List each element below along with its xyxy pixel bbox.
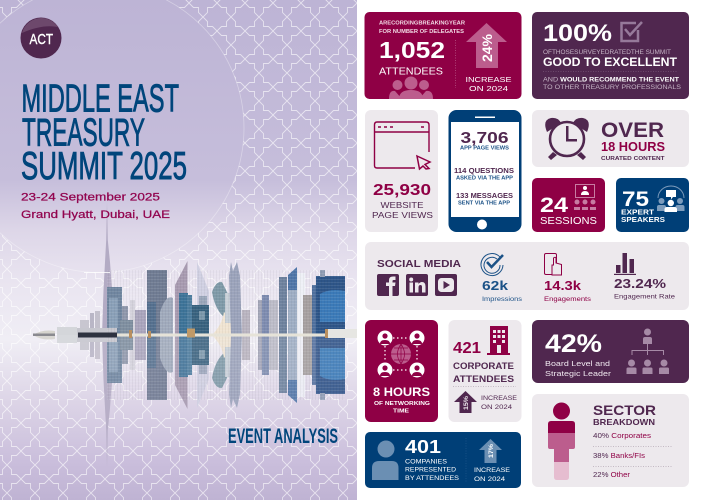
number: 75 speakers: SPEAKERS	[621, 217, 665, 224]
text: board level and strategic leader: Strategic Leader	[545, 369, 612, 378]
panel: website views	[365, 110, 438, 232]
text: over 18 hours	[601, 119, 665, 162]
heading: sector breakdown: SECTOR	[593, 402, 656, 418]
text: increase on 2024: ON 2024	[474, 476, 506, 483]
event date and venue: Grand Hyatt, Dubai, UAE	[21, 209, 170, 221]
text: corporate attendees: CORPORATE	[453, 361, 514, 371]
panel: attendees	[364, 12, 522, 99]
text: 8 hours of networking: 8 HOURS	[373, 387, 430, 399]
number: website page views: WEBSITE	[380, 200, 424, 210]
stat: engagement rate	[614, 253, 675, 300]
arrow: 17 percent increase: 17%	[488, 444, 495, 458]
arrow: 17 percent increase	[479, 439, 502, 463]
number: 75 speakers: EXPERT	[621, 210, 655, 216]
stat: engagements: 14.3k	[544, 278, 582, 293]
icon: linkedin	[406, 274, 428, 296]
icon: browser window	[374, 122, 430, 169]
icon: facebook	[377, 274, 399, 296]
stat: questions: ASKED VIA THE APP	[456, 176, 513, 182]
icon: org chart	[626, 328, 669, 374]
panel: corporate attendees	[448, 320, 522, 422]
stat: impressions: 62k	[482, 278, 509, 293]
text: 401 companies: REPRESENTED	[405, 466, 456, 474]
text: over 18 hours: OVER	[601, 119, 664, 142]
heading: sector breakdown: BREAKDOWN	[593, 417, 655, 427]
icon: presentation audience	[574, 184, 596, 210]
stat: app page views: 3,706	[460, 130, 509, 147]
number: website page views: 25,930	[373, 182, 431, 199]
text: 8 hours of networking	[373, 387, 431, 414]
image: Dubai skyline with reflection	[33, 202, 357, 468]
logo: ACT: ACT	[30, 31, 53, 48]
number: 75 speakers	[621, 188, 665, 224]
stat: impressions	[481, 254, 523, 303]
heading: social media: SOCIAL MEDIA	[377, 258, 461, 270]
panel: phone with app statistics	[448, 110, 522, 232]
text: increase on 2024	[466, 75, 512, 93]
arrow: 24 percent increase	[466, 23, 507, 68]
number: 42 percent: 42%	[545, 330, 602, 358]
stat: engagement rate: Engagement Rate	[614, 294, 675, 300]
text: board level and strategic leader	[545, 359, 612, 378]
text: over 18 hours: 18 HOURS	[601, 140, 665, 154]
number: website page views: PAGE VIEWS	[372, 210, 433, 220]
heading: event analysis: EVENT ANALYSIS	[228, 425, 338, 448]
text: record year	[379, 21, 465, 35]
text: 401 companies: 401	[405, 437, 441, 457]
text: recommendation: TO OTHER TREASURY PROFESSIONALS	[543, 84, 681, 91]
panel: networking	[365, 320, 438, 422]
stat: impressions: Impressions	[482, 296, 523, 303]
stat: engagements: Engagements	[544, 296, 592, 303]
number: 1,052 attendees	[379, 37, 445, 78]
text: survey rating: GOOD TO EXCELLENT	[543, 57, 677, 69]
list: sector shares	[593, 433, 673, 479]
text: increase on 2024: INCREASE	[474, 467, 510, 474]
text: 8 hours of networking: TIME	[393, 408, 409, 414]
text: increase on 2024: ON 2024	[469, 84, 508, 93]
icon: checkbox	[622, 22, 642, 41]
stat: app page views	[460, 130, 510, 152]
number: 24 sessions: 24	[540, 194, 568, 217]
list: sector shares: 40% Corporates	[593, 433, 652, 440]
text: recommendation	[543, 76, 681, 91]
panel: survey	[532, 12, 689, 99]
stat: engagement rate: 23.24%	[614, 276, 667, 291]
text: 401 companies: BY ATTENDEES	[405, 475, 459, 482]
text: record year: ARECORDINGBREAKINGYEAR	[379, 21, 465, 27]
title: TREASURY	[22, 112, 145, 154]
number: 24 sessions	[540, 194, 597, 227]
stat: messages: 133 MESSAGES	[456, 191, 513, 200]
number: 24 sessions: SESSIONS	[540, 215, 597, 227]
number: 1,052 attendees: ATTENDEES	[379, 66, 443, 78]
list: sector shares: 38% Banks/FIs	[593, 453, 646, 460]
text: record year: FOR NUMBER OF DELEGATES	[379, 29, 464, 35]
title: MIDDLE EAST	[22, 78, 179, 120]
panel: companies represented	[365, 432, 521, 488]
panel: board level	[532, 320, 689, 383]
icon: youtube	[435, 274, 457, 296]
title	[21, 78, 187, 188]
panel: sessions	[532, 178, 605, 232]
text: increase on 2024: INCREASE	[466, 75, 512, 84]
text: recommendation: AND WOULD RECOMMEND THE EVENT	[543, 76, 679, 84]
event date and venue	[21, 192, 170, 221]
number: 75 speakers: 75	[622, 188, 649, 211]
panel: expert speakers	[616, 178, 689, 232]
number: 1,052 attendees: 1,052	[379, 37, 445, 63]
text: increase on 2024	[481, 395, 517, 411]
text: over 18 hours: CURATED CONTENT	[601, 156, 665, 162]
number: 421: 421	[453, 340, 481, 357]
stat: app page views: APP PAGE VIEWS	[460, 146, 510, 152]
panel: sector breakdown	[532, 394, 689, 487]
icon: speakers with speech bubble	[657, 186, 684, 212]
stat: questions	[454, 166, 514, 182]
text: increase on 2024	[474, 467, 510, 483]
text: survey rating: OFTHOSESURVEYEDRATEDTHE SUMMIT	[543, 50, 671, 56]
chart: person split by sector	[548, 402, 575, 480]
stat: messages	[456, 191, 513, 206]
title: SUMMIT 2025	[21, 145, 187, 188]
icon: alarm clock	[545, 118, 589, 160]
list: sector shares: 22% Other	[593, 472, 631, 479]
event date and venue: 23-24 September 2025	[21, 192, 160, 204]
logo: ACT	[20, 18, 62, 58]
heading: sector breakdown	[593, 402, 656, 427]
text: 8 hours of networking: OF NETWORKING	[374, 401, 431, 407]
text: corporate attendees: ATTENDEES	[453, 374, 514, 384]
icon: office building	[487, 326, 510, 355]
text: increase on 2024: ON 2024	[481, 404, 513, 411]
text: survey rating	[543, 50, 677, 69]
panel: cover	[0, 0, 357, 500]
text: corporate attendees	[453, 361, 514, 384]
stat: messages: SENT VIA THE APP	[458, 200, 510, 206]
text: board level and strategic leader: Board Level and	[545, 359, 610, 368]
panel: social media	[365, 242, 689, 310]
panel: curated content	[532, 110, 689, 167]
arrow: 24 percent increase: 24%	[479, 33, 495, 62]
text: 401 companies: COMPANIES	[405, 458, 447, 466]
number: 100 percent: 100%	[543, 20, 612, 47]
text: increase on 2024: INCREASE	[481, 395, 517, 402]
number: website page views	[372, 182, 433, 220]
stat: engagements	[544, 254, 592, 303]
text: 401 companies	[405, 437, 459, 482]
icon: person	[372, 440, 398, 480]
stat: questions: 114 QUESTIONS	[454, 166, 514, 175]
icon: networking globe	[378, 330, 424, 378]
icon: people	[389, 76, 433, 99]
arrow: 15 percent increase: 15%	[463, 396, 470, 410]
